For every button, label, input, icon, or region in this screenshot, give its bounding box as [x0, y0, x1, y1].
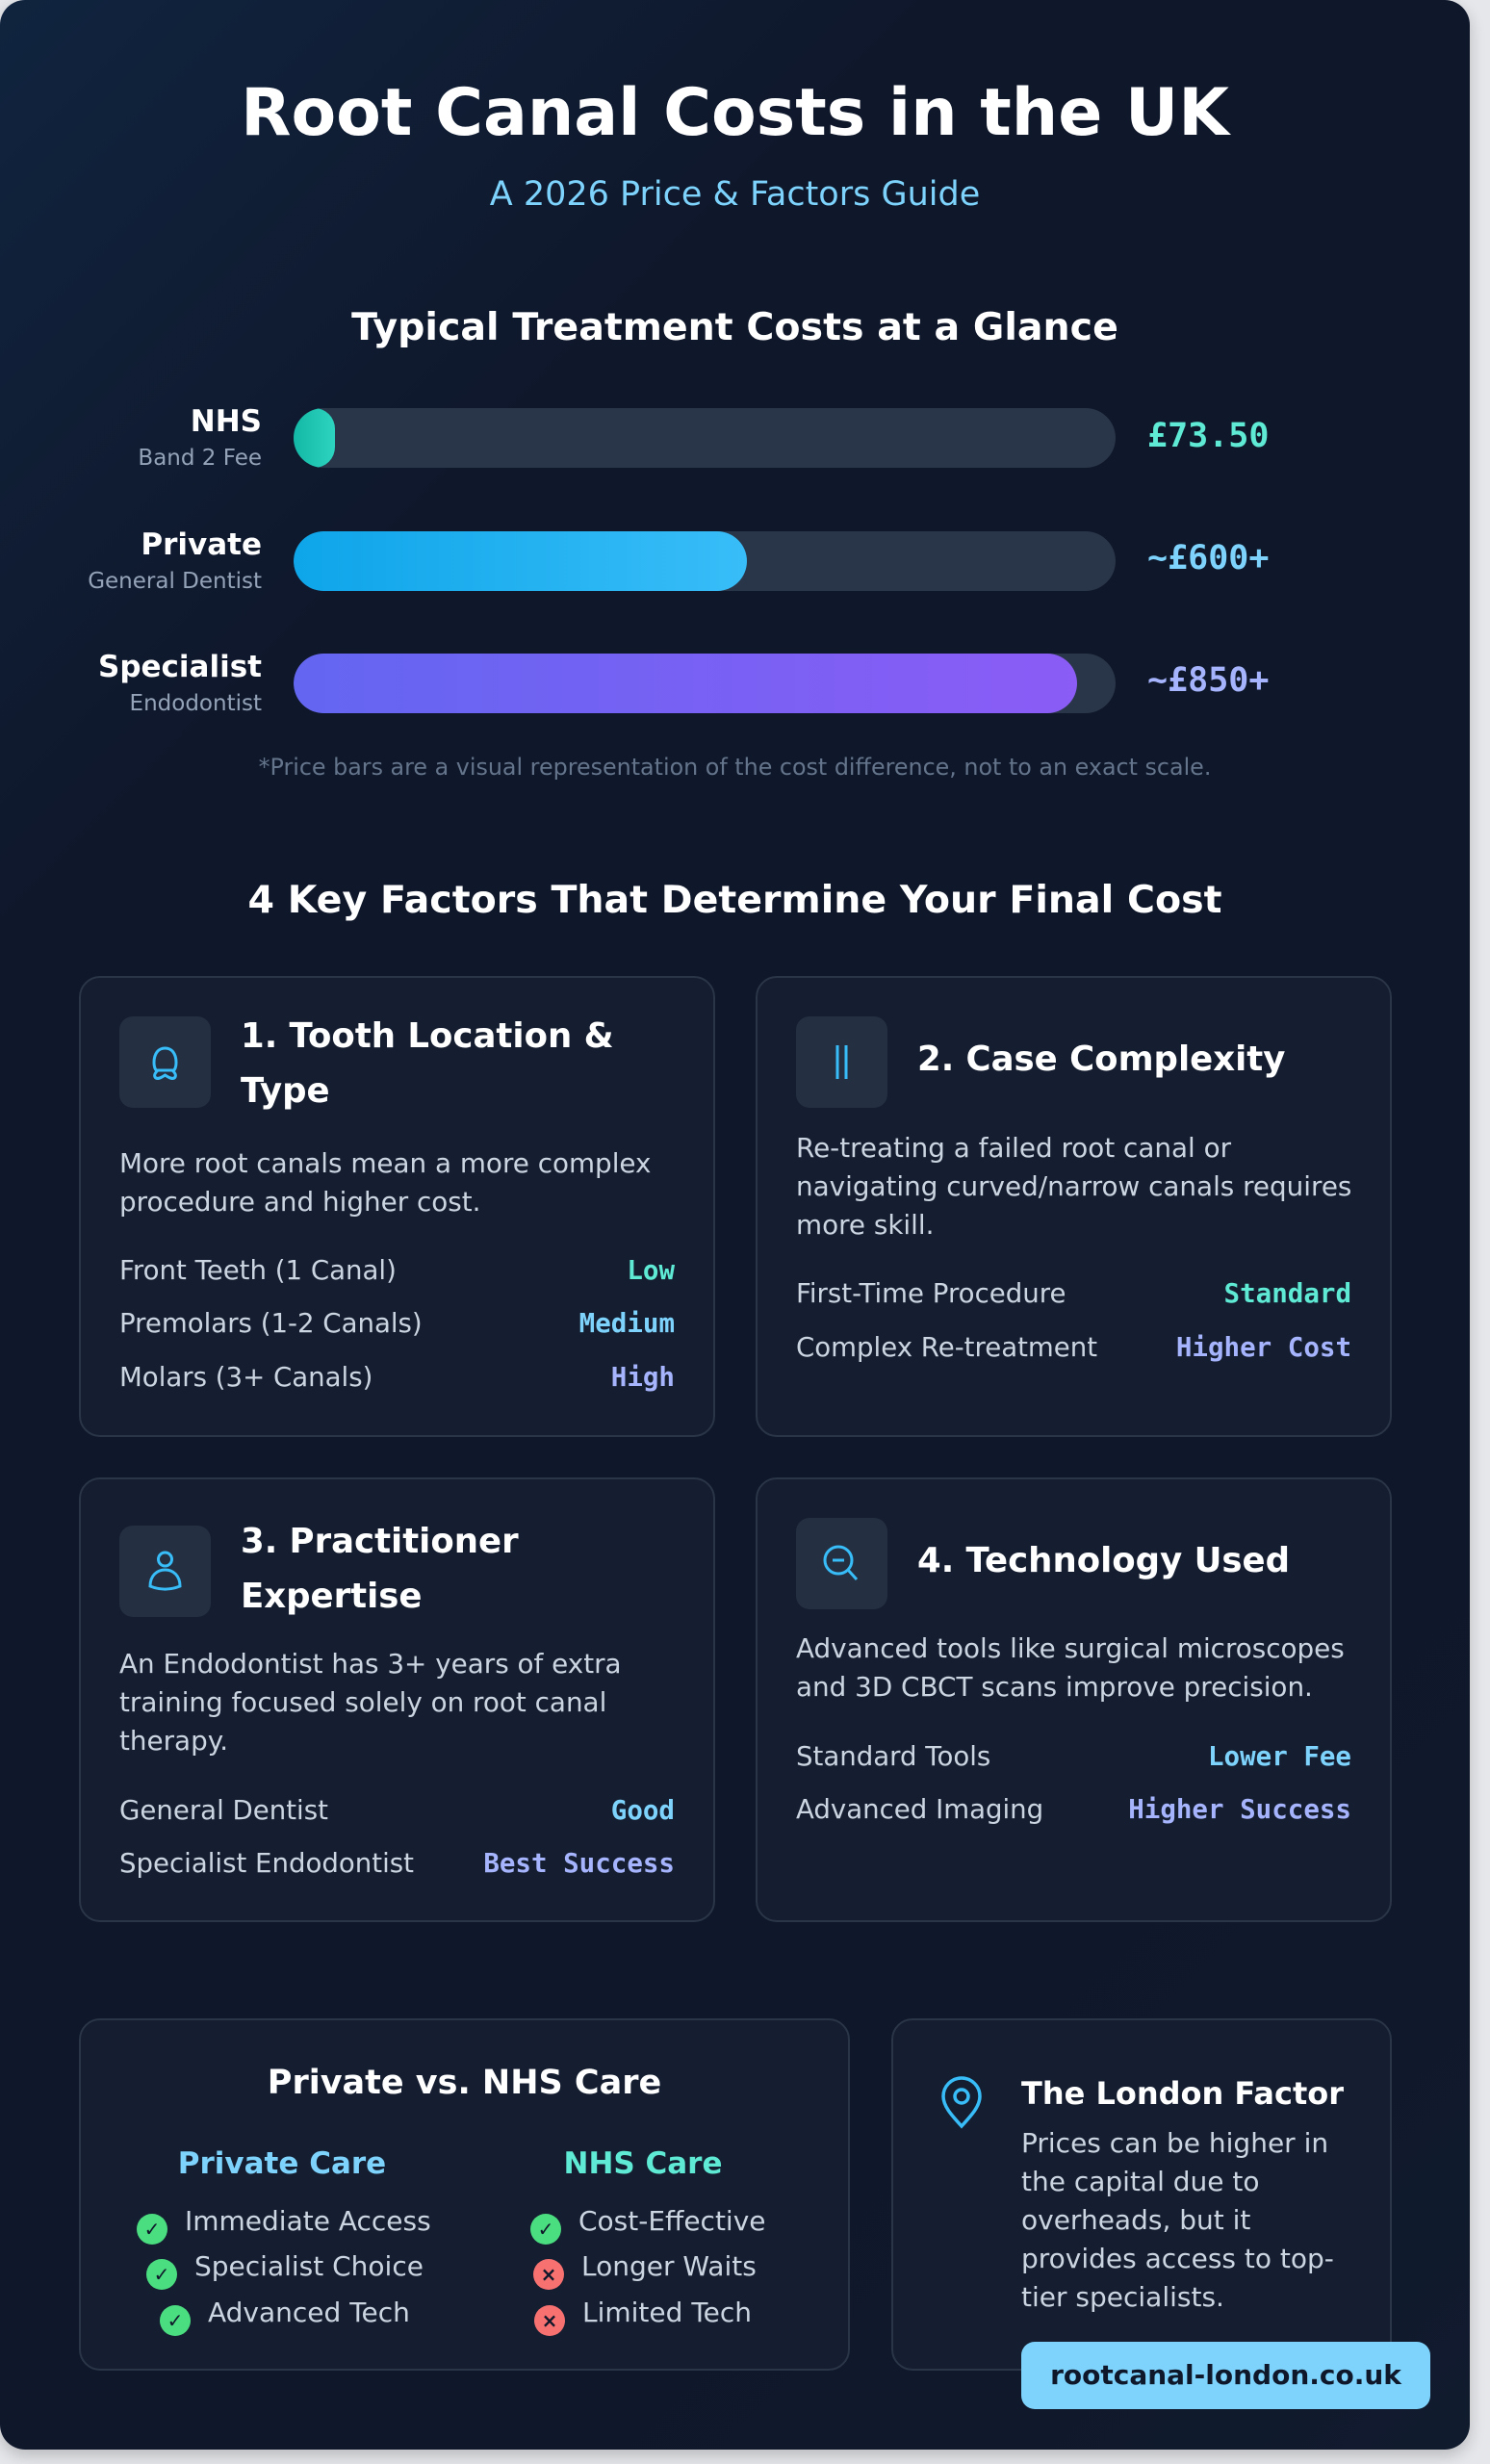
panel: London factor — [891, 2018, 1392, 2371]
row: molars: Molars (3+ Canals) — [119, 1361, 372, 1393]
row: specialist: Specialist Endodontist — [119, 1847, 414, 1879]
bar: NHS — [294, 408, 1116, 468]
label: NHS: Band 2 Fee — [138, 446, 262, 471]
description: training focused solely on root canal — [119, 1686, 606, 1718]
column header: NHS Care — [564, 2146, 722, 2181]
item: Cost-Effective — [578, 2205, 766, 2237]
item: Longer Waits — [581, 2250, 757, 2282]
row: first-time: Standard — [1224, 1278, 1351, 1309]
row: retreatment: Higher Cost — [1176, 1332, 1351, 1363]
panel: private vs NHS — [79, 2018, 850, 2371]
description: tier specialists. — [1021, 2281, 1224, 2313]
description: Prices can be higher in — [1021, 2127, 1328, 2159]
label: NHS: NHS — [191, 404, 262, 439]
row: premolars: Premolars (1-2 Canals) — [119, 1307, 423, 1339]
row: premolars — [119, 1307, 675, 1339]
row: advanced — [796, 1793, 1351, 1825]
description: Re-treating a failed root canal or — [796, 1132, 1231, 1164]
description — [119, 1147, 651, 1218]
row: front — [119, 1254, 675, 1286]
subtitle: A 2026 Price & Factors Guide — [490, 175, 980, 214]
bar: Private — [294, 531, 1116, 591]
item: ✓ — [167, 2309, 183, 2332]
card title: 3. Practitioner — [241, 1522, 519, 1561]
description: more skill. — [796, 1209, 934, 1241]
card title: 2. Case Complexity — [917, 1040, 1285, 1079]
row: general: General Dentist — [119, 1794, 328, 1826]
row: front: Low — [627, 1255, 675, 1286]
panel: tooth location — [79, 976, 715, 1437]
row: retreatment — [796, 1331, 1351, 1363]
description: the capital due to — [1021, 2166, 1260, 2197]
button: website: rootcanal-london.co.uk — [1050, 2359, 1401, 2391]
icon: canals — [796, 1016, 887, 1108]
description: Advanced tools like surgical microscopes — [796, 1632, 1345, 1664]
row: advanced: Higher Success — [1128, 1794, 1351, 1825]
description: procedure and higher cost. — [119, 1186, 480, 1218]
row: advanced: Advanced Imaging — [796, 1793, 1043, 1825]
bar: Specialist — [294, 654, 1116, 713]
description — [1021, 2127, 1334, 2313]
heading: factors: 4 Key Factors That Determine Your Final Cost — [248, 878, 1221, 922]
description: An Endodontist has 3+ years of extra — [119, 1648, 622, 1680]
row: general: Good — [611, 1795, 675, 1826]
panel: case complexity — [756, 976, 1392, 1437]
description: More root canals mean a more complex — [119, 1147, 651, 1179]
label: Specialist: Endodontist — [130, 691, 262, 716]
description: overheads, but it — [1021, 2204, 1250, 2236]
column: NHS — [530, 2146, 766, 2336]
item — [146, 2250, 424, 2290]
card title: Type — [241, 1071, 330, 1111]
value: Specialist: ~£850+ — [1147, 661, 1269, 700]
item: ✓ — [144, 2218, 160, 2241]
value: NHS: £73.50 — [1147, 417, 1269, 455]
column header: Private Care — [178, 2146, 386, 2181]
label: Specialist — [98, 650, 262, 716]
row: standard — [796, 1740, 1351, 1772]
icon: map pin — [941, 2076, 982, 2129]
label: Specialist: Specialist — [98, 650, 262, 684]
item: Immediate Access — [185, 2205, 431, 2237]
icon: person — [119, 1526, 211, 1617]
value: Private: ~£600+ — [1147, 539, 1269, 578]
bar chart — [88, 404, 1269, 716]
item: ✓ — [154, 2263, 169, 2286]
label: Private: Private — [141, 527, 262, 562]
description: provides access to top- — [1021, 2243, 1334, 2274]
description: navigating curved/narrow canals requires — [796, 1170, 1351, 1202]
description — [119, 1648, 622, 1757]
panel: technology — [756, 1477, 1392, 1922]
button: website — [1021, 2342, 1430, 2409]
row: retreatment: Complex Re-treatment — [796, 1331, 1097, 1363]
panel: practitioner — [79, 1477, 715, 1922]
row: specialist: Best Success — [483, 1848, 675, 1879]
icon: magnifier — [796, 1518, 887, 1609]
item: Limited Tech — [582, 2297, 752, 2328]
card title — [241, 1016, 614, 1111]
card title — [241, 1522, 519, 1616]
item — [534, 2297, 752, 2336]
item — [533, 2250, 757, 2290]
description: therapy. — [119, 1725, 228, 1757]
item: × — [542, 2309, 557, 2332]
row: standard: Lower Fee — [1208, 1741, 1351, 1772]
item: Specialist Choice — [194, 2250, 424, 2282]
label: Private — [88, 527, 262, 594]
label: NHS — [138, 404, 262, 471]
row: premolars: Medium — [579, 1308, 675, 1339]
description — [796, 1132, 1351, 1241]
title: Root Canal Costs in the UK — [241, 75, 1229, 151]
card title: 1. Tooth Location & — [241, 1016, 614, 1056]
icon: tooth — [119, 1016, 211, 1108]
item — [137, 2205, 431, 2245]
column: private — [137, 2146, 431, 2336]
item: ✓ — [538, 2218, 553, 2241]
label: Private: General Dentist — [88, 569, 262, 594]
description — [796, 1632, 1345, 1703]
row: molars — [119, 1361, 675, 1393]
footnote: *Price bars are a visual representation of the cost difference, not to an exact scale. — [259, 754, 1211, 781]
panel title: Private vs. NHS Care — [268, 2064, 661, 2102]
row: front: Front Teeth (1 Canal) — [119, 1254, 397, 1286]
row: specialist — [119, 1847, 675, 1879]
row: first-time: First-Time Procedure — [796, 1277, 1066, 1309]
panel title: The London Factor — [1021, 2075, 1344, 2112]
item — [530, 2205, 766, 2245]
item: Advanced Tech — [208, 2297, 410, 2328]
row: general — [119, 1794, 675, 1826]
card title: 4. Technology Used — [917, 1541, 1290, 1580]
item: × — [541, 2263, 556, 2286]
card title: Expertise — [241, 1577, 422, 1616]
row: standard: Standard Tools — [796, 1740, 990, 1772]
row: first-time — [796, 1277, 1351, 1309]
description: and 3D CBCT scans improve precision. — [796, 1671, 1313, 1703]
item — [160, 2297, 410, 2336]
row: molars: High — [611, 1362, 675, 1393]
heading: costs: Typical Treatment Costs at a Glance — [351, 305, 1118, 349]
